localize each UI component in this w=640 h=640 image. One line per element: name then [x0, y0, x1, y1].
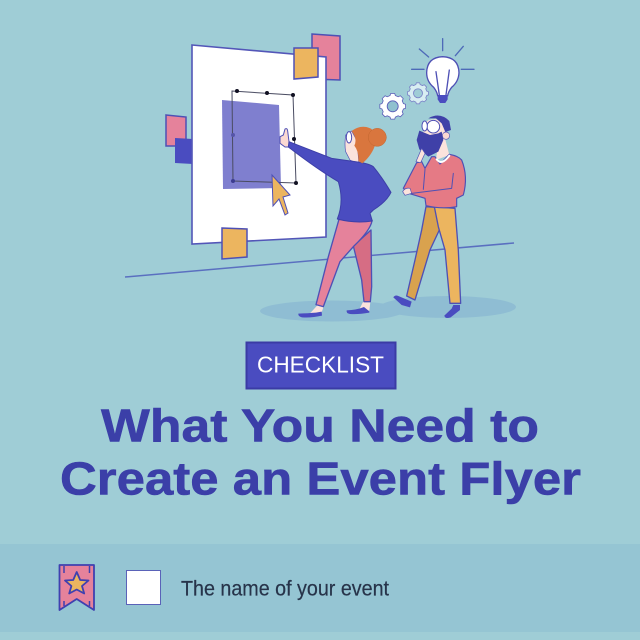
woman [280, 127, 391, 317]
selection frame [231, 89, 298, 185]
blue square left [175, 138, 193, 164]
man [393, 116, 465, 318]
pink square left [166, 115, 186, 146]
gear large [380, 93, 406, 119]
woman: legs and shoes [298, 219, 372, 317]
yellow square top [294, 48, 318, 79]
lightbulb [412, 39, 474, 103]
title: What You Need to [101, 400, 539, 452]
cursor arrow [272, 175, 290, 215]
woman: upper body [280, 127, 391, 222]
lightbulb rays [412, 39, 474, 69]
flyer sheet [192, 45, 326, 244]
checkbox [126, 570, 160, 604]
man: legs and shoes [393, 207, 461, 318]
title: Create an Event Flyer [60, 452, 581, 504]
floor line [125, 243, 514, 277]
gear small [408, 83, 428, 104]
checklist row band [0, 544, 640, 632]
illustration: flyer design scene [125, 34, 516, 322]
floor shadows [260, 296, 516, 322]
yellow square bottom [222, 228, 247, 259]
purple image block [222, 100, 281, 189]
man: upper body [403, 116, 465, 208]
pink square behind flyer top right [312, 34, 340, 80]
checklist item text: The name of your event [181, 576, 389, 600]
icon: bookmark with star [60, 565, 94, 610]
badge: checklist [246, 342, 396, 388]
title [60, 400, 581, 504]
badge: checklist: CHECKLIST [257, 352, 384, 378]
